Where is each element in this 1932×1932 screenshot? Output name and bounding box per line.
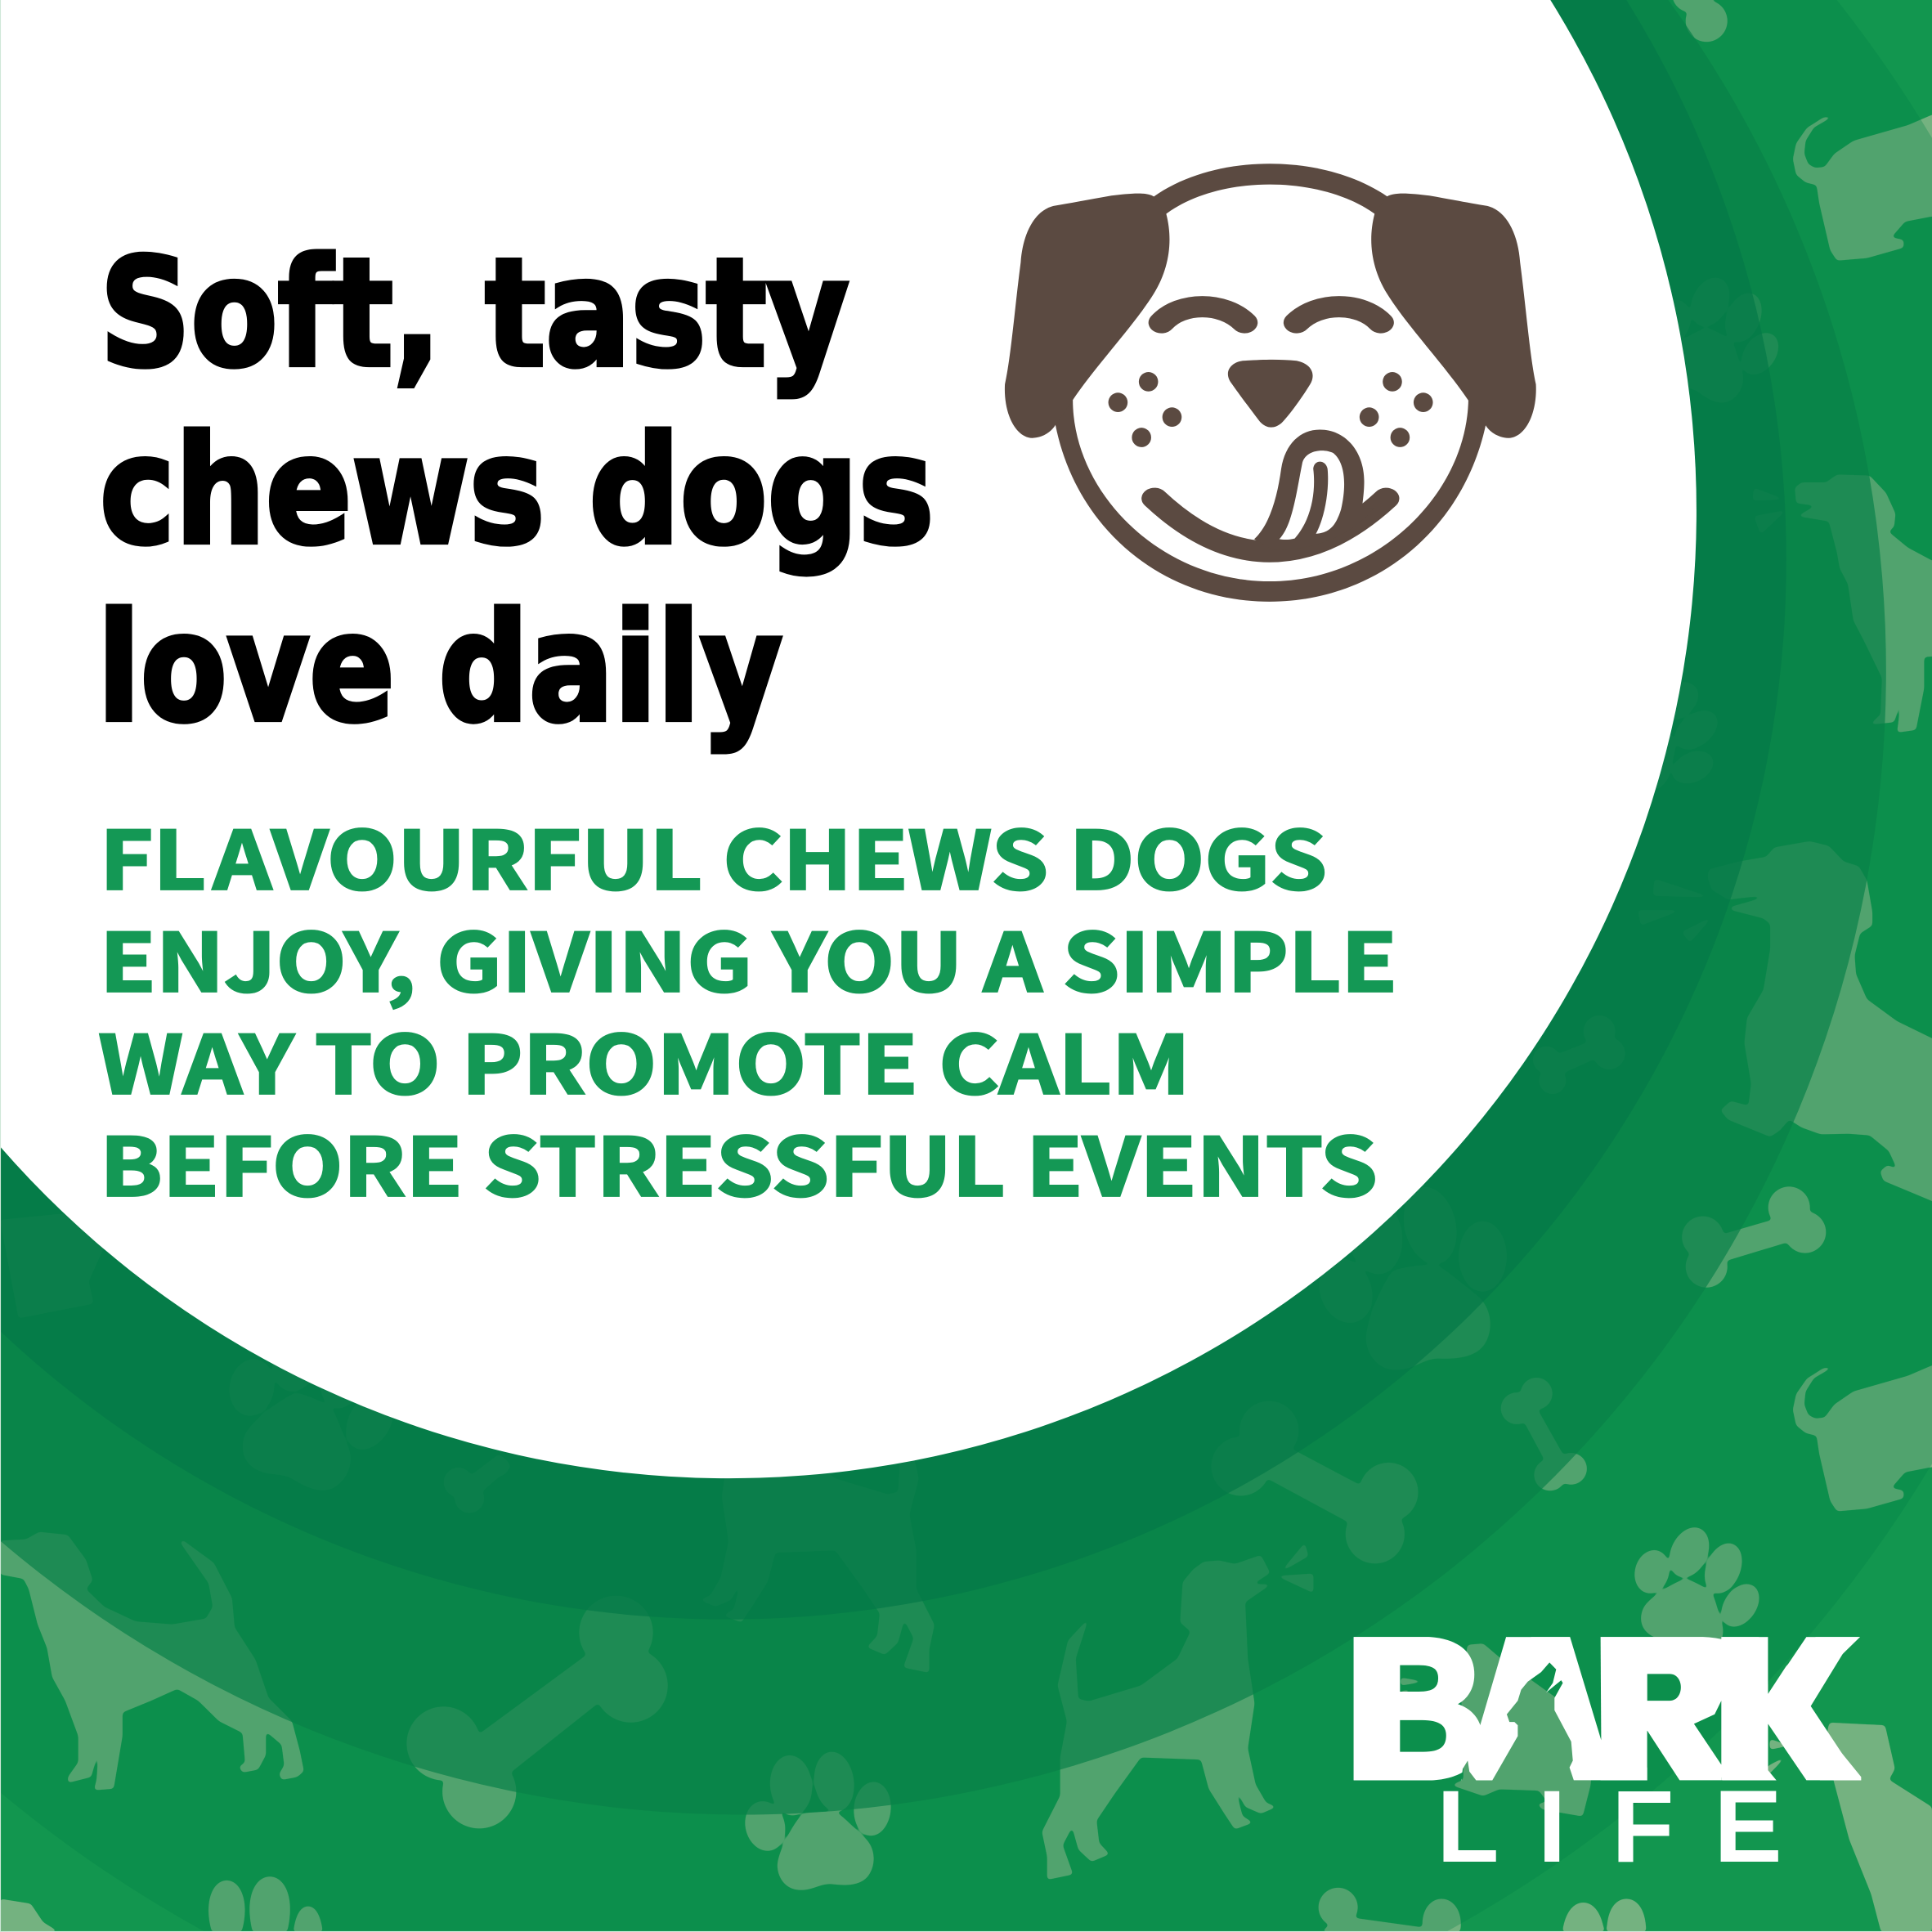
logo: Bark Life: K — [1713, 1598, 1858, 1819]
white circle panel — [0, 0, 1697, 1478]
logo: Bark Life: R — [1589, 1598, 1773, 1819]
subheading — [99, 796, 1397, 1220]
subheading: WAY TO PROMOTE CALM — [99, 1001, 1190, 1117]
logo: Bark Life: B — [1344, 1598, 1487, 1819]
concentric ring 2 — [0, 0, 1786, 1620]
headline: love daily — [97, 582, 782, 755]
logo: Bark Life — [1354, 1637, 1861, 1863]
logo: Bark Life: LIFE — [1437, 1769, 1782, 1884]
headline — [97, 227, 934, 755]
logo: Bark Life: A — [1461, 1598, 1653, 1819]
subheading: BEFORE STRESSFUL EVENTS — [100, 1104, 1378, 1220]
subheading: ENJOY, GIVING YOU A SIMPLE — [100, 899, 1397, 1015]
icon: happy dog face licking lips — [1005, 164, 1536, 602]
headline: Soft, tasty — [100, 227, 849, 401]
headline: chews dogs — [100, 405, 934, 578]
subheading: FL AVOURFUL CHEWS DOGS — [100, 796, 1327, 912]
